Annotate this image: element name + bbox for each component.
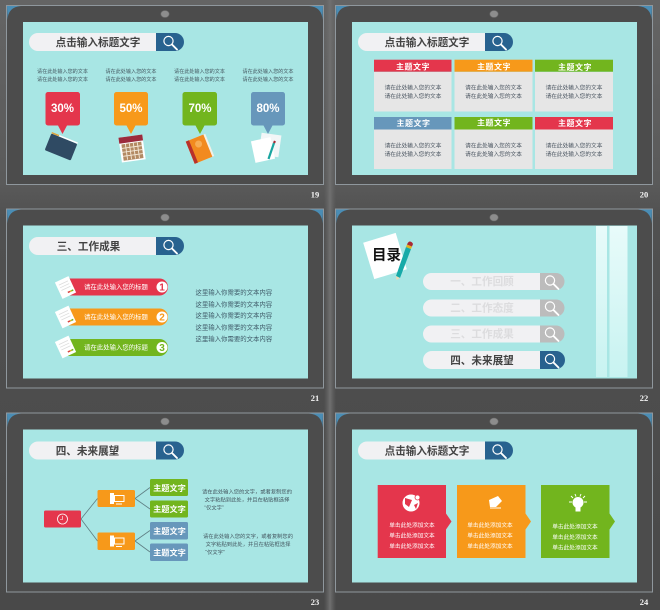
leaf node 1 [150, 479, 188, 496]
card 4: 请在此处输入您的文本 [385, 142, 442, 150]
text block [196, 288, 273, 343]
card 6: 主题文字 [558, 118, 592, 128]
title bar: 点击输入标题文字 [385, 36, 469, 49]
menu item 1: 一、工作回顾 [450, 275, 514, 288]
step card: red: 单击此处添加文本 [389, 542, 435, 550]
leaf node 4: 主题文字 [153, 548, 186, 558]
callout: 30%: 30% [51, 103, 74, 115]
panel: slide 23 [6, 413, 324, 607]
text blocks: 请在此处输入您的文本 [174, 76, 225, 83]
title bar: 三、工作成果 [57, 240, 121, 253]
card 1: 主题文字 [396, 62, 430, 72]
card 1: 请在此处输入您的文本 [385, 92, 442, 100]
list item 2: 请在此处输入您的标题 [84, 312, 149, 321]
title bar [29, 442, 184, 460]
icon: wallet [45, 132, 78, 161]
card 2: 请在此处输入您的文本 [465, 92, 522, 100]
icon: paper and pencil [251, 133, 281, 163]
title bar: 点击输入标题文字 [56, 36, 140, 49]
list item 3: 3 [159, 343, 165, 354]
card 3: 请在此处输入您的文本 [546, 92, 603, 100]
leaf node 2: 主题文字 [153, 504, 186, 514]
panel: slide 22 [336, 209, 652, 403]
icon: book [186, 134, 214, 164]
menu item 2 [423, 300, 564, 316]
text block: 这里输入你需要的文本内容 [196, 300, 273, 308]
leaf node 3 [150, 522, 188, 540]
list item 3 [55, 336, 168, 358]
text block 1: 文字粘贴到此处，并且在粘贴框选择 [205, 496, 290, 504]
icon: calendar [118, 134, 146, 163]
list item 3: 请在此处输入您的标题 [84, 342, 149, 352]
title bar: 四、未来展望 [56, 444, 120, 458]
text block 2 [203, 532, 293, 556]
step card: orange: 单击此处添加文本 [467, 542, 513, 550]
page number: 21 [311, 393, 319, 403]
branch node 2 [98, 532, 135, 550]
step card: green [541, 485, 615, 558]
card 4: 主题文字 [396, 118, 430, 128]
card 5: 主题文字 [477, 118, 511, 128]
title bar [29, 33, 184, 51]
text block: 这里输入你需要的文本内容 [196, 322, 273, 332]
leaf node 1: 主题文字 [153, 483, 186, 493]
card 2 [454, 60, 532, 112]
tree connectors [81, 488, 150, 552]
text blocks [37, 68, 293, 83]
step card: orange: 单击此处添加文本 [467, 532, 513, 540]
callout: 50% [114, 92, 148, 134]
page number: 23 [311, 597, 319, 607]
step card: orange [457, 485, 531, 558]
list item 2: 2 [159, 312, 165, 324]
menu item 3: 三、工作成果 [450, 328, 514, 340]
text block 2: 请在此处输入您的文字，或者复制您的 [203, 532, 293, 540]
title bar: 点击输入标题文字 [385, 444, 469, 458]
card 5: 请在此处输入您的文本 [465, 142, 522, 150]
menu item 2: 二、工作态度 [450, 302, 514, 314]
branch node 1 [98, 490, 135, 507]
card 5: 请在此处输入您的文本 [465, 150, 522, 158]
text blocks: 请在此处输入您的文本 [106, 68, 156, 75]
text block 2: “仅文字” [205, 548, 225, 556]
callout: 50%: 50% [119, 103, 143, 115]
list item 2 [55, 306, 168, 328]
text blocks: 请在此处输入您的文本 [243, 68, 293, 75]
text block: 这里输入你需要的文本内容 [196, 288, 273, 296]
card 3: 主题文字 [558, 62, 592, 72]
text blocks: 请在此处输入您的文本 [37, 76, 88, 83]
card 6: 请在此处输入您的文本 [546, 142, 603, 150]
text blocks: 请在此处输入您的文本 [37, 68, 88, 75]
card 4 [374, 117, 452, 169]
text block: 这里输入你需要的文本内容 [196, 310, 273, 320]
text block: 这里输入你需要的文本内容 [196, 334, 273, 343]
step card: green: 单击此处添加文本 [552, 522, 598, 530]
list item 1: 请在此处输入您的标题 [84, 282, 149, 291]
text blocks: 请在此处输入您的文本 [243, 76, 293, 83]
text block 1: 请在此处输入您的文字，或者复制您的 [202, 488, 292, 496]
step card: red: 单击此处添加文本 [389, 521, 435, 529]
callout: 70%: 70% [188, 103, 212, 115]
panel: slide 24 [336, 413, 652, 607]
leaf node 4 [150, 544, 188, 561]
step card: orange: 单击此处添加文本 [467, 521, 513, 529]
callout: 30% [46, 92, 80, 134]
menu item 1 [423, 273, 564, 290]
card 2: 请在此处输入您的文本 [465, 84, 522, 92]
title bar [358, 442, 513, 460]
card 3 [535, 60, 613, 112]
panel: slide 21 [6, 209, 324, 403]
menu item 3 [423, 326, 564, 342]
text blocks: 请在此处输入您的文本 [174, 68, 225, 75]
title bar [29, 237, 184, 255]
card 3: 请在此处输入您的文本 [546, 84, 603, 92]
title bar [358, 33, 513, 51]
menu item 4: 四、未来展望 [450, 354, 514, 367]
callout: 80%: 80% [256, 103, 280, 115]
leaf node 3: 主题文字 [153, 526, 186, 536]
leaf node 2 [150, 500, 188, 518]
panel: slide 19 [6, 6, 324, 200]
list item 1: 1 [159, 282, 165, 294]
icon: notepad with title: 目录 [372, 247, 401, 264]
text block 1 [202, 488, 292, 512]
root node [44, 510, 81, 528]
card 1: 请在此处输入您的文本 [385, 84, 442, 92]
card 5 [454, 117, 532, 169]
step card: red [378, 485, 452, 558]
callout: 80% [251, 92, 285, 134]
step card: green: 单击此处添加文本 [552, 544, 598, 552]
card 6 [535, 117, 613, 169]
page number: 20 [640, 190, 648, 200]
page number: 24 [640, 597, 649, 607]
step card: red: 单击此处添加文本 [389, 532, 435, 540]
panel: slide 20 [336, 6, 652, 200]
text blocks: 请在此处输入您的文本 [106, 76, 156, 83]
page number: 22 [640, 393, 648, 403]
text block 2: 文字粘贴到此处，并且在粘贴框选择 [206, 540, 291, 548]
page number: 19 [311, 190, 319, 200]
card 2: 主题文字 [477, 62, 511, 72]
decorative light stripes [596, 226, 628, 377]
card 1 [374, 60, 452, 112]
list item 1 [55, 276, 168, 299]
step card: green: 单击此处添加文本 [552, 533, 598, 541]
text block 1: “仅文字” [204, 504, 224, 512]
card 4: 请在此处输入您的文本 [385, 150, 442, 158]
icon: notepad with title [363, 233, 413, 280]
menu item 4 [423, 351, 565, 369]
card 6: 请在此处输入您的文本 [546, 150, 603, 158]
callout: 70% [182, 92, 217, 134]
